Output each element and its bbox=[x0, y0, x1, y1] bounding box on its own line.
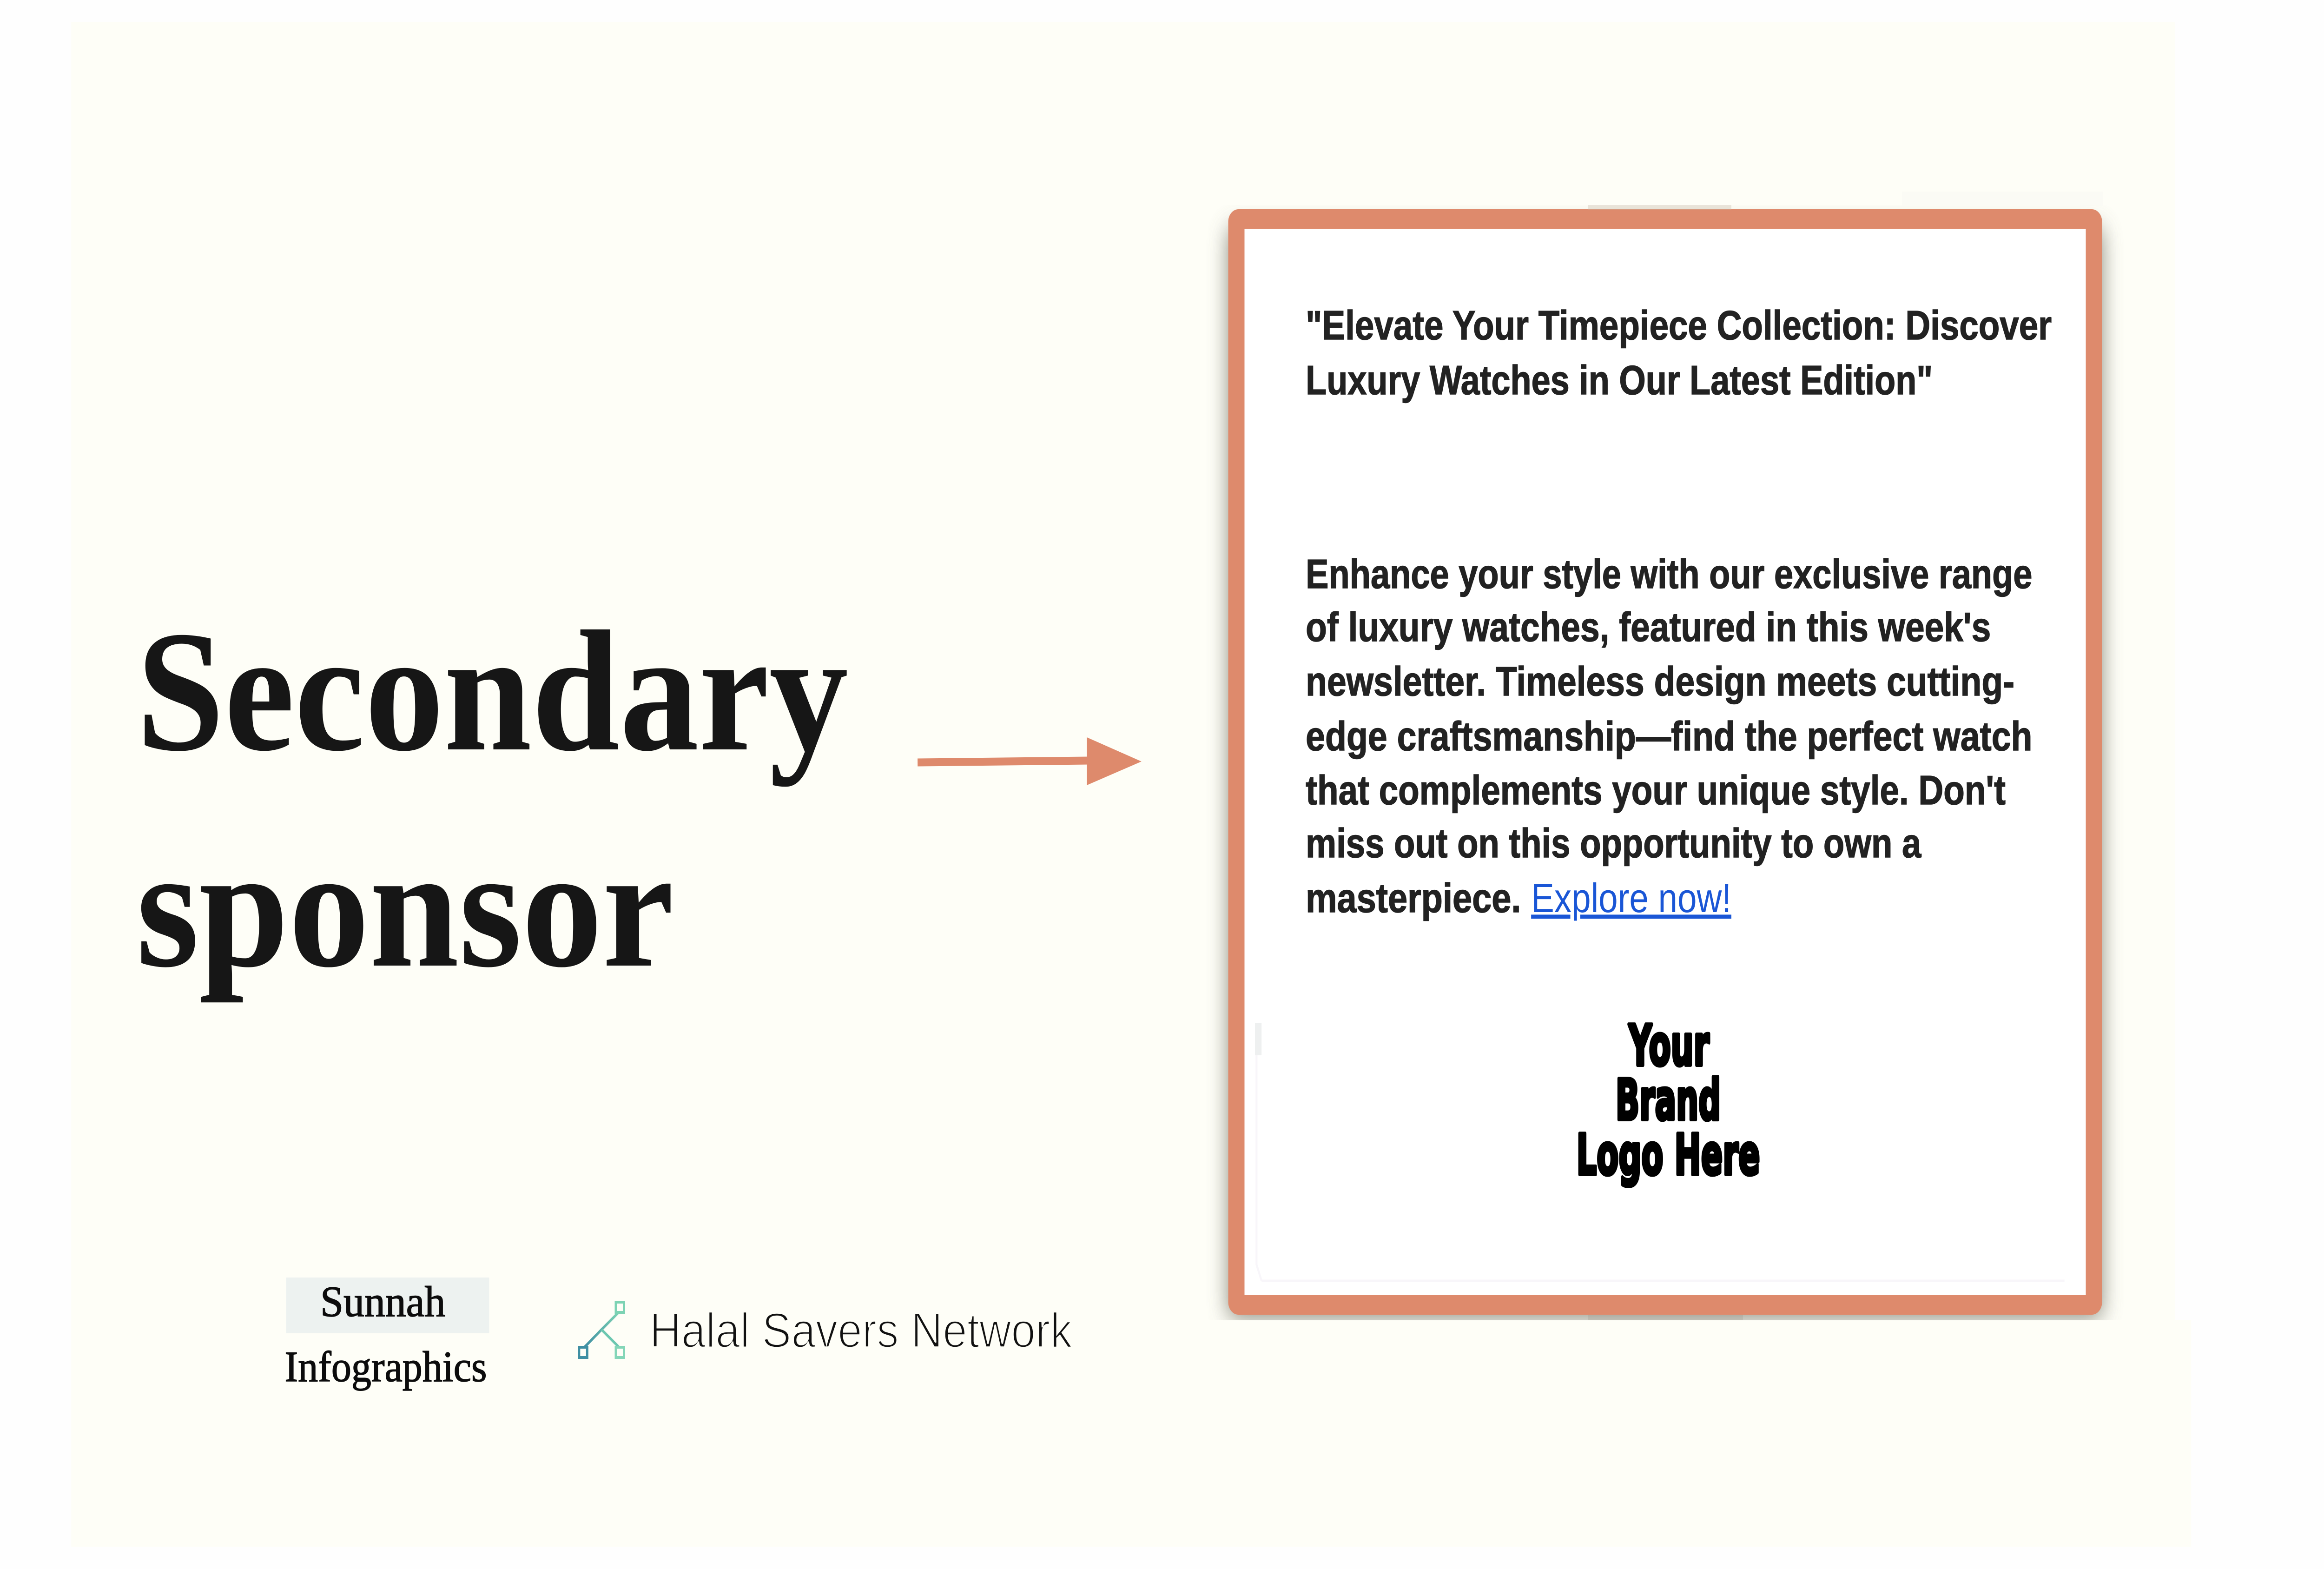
ad body text: edge craftsmanship—find the perfect watch bbox=[1306, 714, 2032, 760]
brand logo placeholder bbox=[1577, 1013, 1760, 1188]
infographic canvas bbox=[141, 192, 2123, 1391]
wordmark: Halal Savers Network bbox=[650, 1303, 1072, 1358]
title bbox=[136, 596, 848, 1003]
ad headline bbox=[1306, 303, 2052, 404]
ad body text: Enhance your style with our exclusive range bbox=[1306, 552, 2032, 597]
ad body text: newsletter. Timeless design meets cutting- bbox=[1306, 659, 2014, 705]
ad body text: of luxury watches, featured in this week's bbox=[1306, 605, 1991, 650]
logo: Sunnah Infographics: Infographics bbox=[285, 1343, 487, 1391]
Sunnah badge bbox=[286, 1278, 489, 1333]
ad headline: "Elevate Your Timepiece Collection: Discover bbox=[1306, 303, 2052, 349]
brand logo placeholder: Your bbox=[1628, 1013, 1710, 1079]
title: Secondary bbox=[136, 596, 848, 787]
logo: Sunnah Infographics: Sunnah bbox=[320, 1278, 445, 1326]
cream background upper bbox=[71, 22, 2175, 1320]
ad body text: that complements your unique style. Don't bbox=[1306, 768, 2006, 814]
brand logo placeholder: Brand bbox=[1616, 1068, 1721, 1133]
card shadow bbox=[1228, 228, 2102, 1318]
panel: ad card bbox=[1228, 205, 2102, 1320]
network icon bbox=[579, 1302, 624, 1357]
cream background lower bbox=[71, 1320, 2191, 1547]
arrow bbox=[918, 737, 1142, 785]
card frame bbox=[1236, 219, 2094, 1305]
ad body text: miss out on this opportunity to own a bbox=[1306, 821, 1921, 867]
ad body text: masterpiece. bbox=[1306, 876, 1521, 921]
brand logo placeholder: Logo Here bbox=[1577, 1123, 1760, 1188]
link: Explore now! bbox=[1531, 876, 1731, 921]
ad headline: Luxury Watches in Our Latest Edition" bbox=[1306, 358, 1933, 404]
ad body text bbox=[1306, 552, 2032, 921]
logo: Sunnah Infographics bbox=[285, 1278, 489, 1391]
logo: Halal Savers Network bbox=[579, 1302, 1072, 1358]
title: sponsor bbox=[136, 812, 674, 1003]
